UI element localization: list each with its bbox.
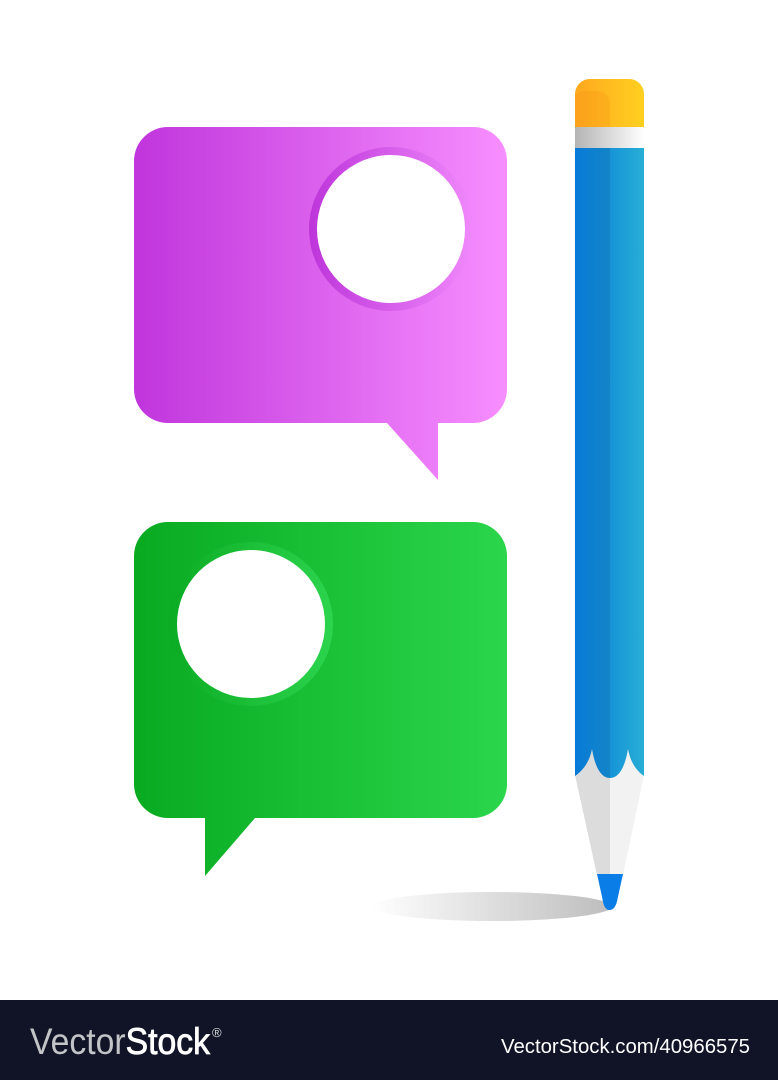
pencil ferrule	[575, 127, 644, 148]
pencil body	[575, 148, 644, 778]
VectorStock logo: VectorStock	[30, 1021, 210, 1062]
pencil eraser	[575, 79, 644, 127]
pencil wood tip	[575, 745, 644, 875]
pencil shadow	[372, 892, 612, 921]
registered mark: ®	[212, 1025, 222, 1040]
purple speech bubble	[134, 127, 507, 480]
footer bar	[0, 1000, 778, 1080]
pencil	[575, 79, 644, 910]
green speech bubble	[134, 522, 507, 876]
pencil lead	[597, 874, 623, 910]
image id: VectorStock.com/40966575	[501, 1036, 750, 1058]
